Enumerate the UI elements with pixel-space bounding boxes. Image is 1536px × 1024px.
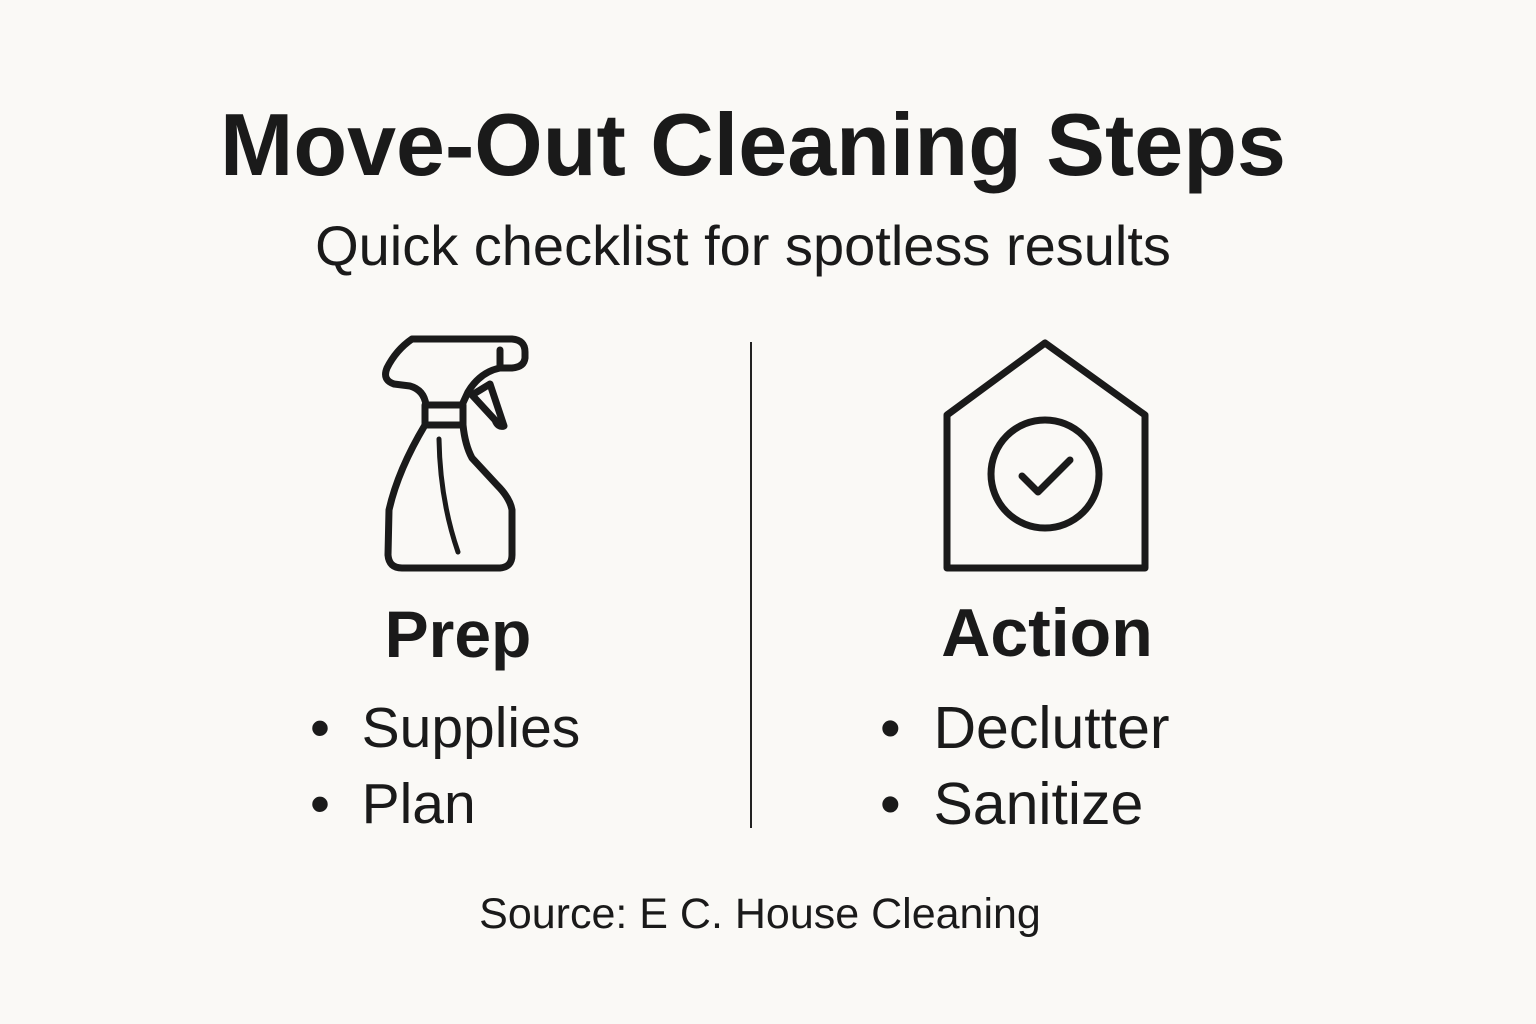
title: Move-Out Cleaning Steps [220,95,1286,194]
source: Source: E C. House Cleaning [479,890,1041,938]
list: prep [310,696,580,836]
list: action: • Declutter [880,695,1170,761]
list: action: • Sanitize [880,771,1143,837]
list: prep: • Supplies [310,696,580,760]
subtitle: Quick checklist for spotless results [315,214,1171,277]
heading: Action: Action [941,595,1153,671]
heading: Prep: Prep [385,597,531,671]
list: action [880,695,1170,837]
divider [750,342,752,828]
list: prep: • Plan [310,772,476,836]
